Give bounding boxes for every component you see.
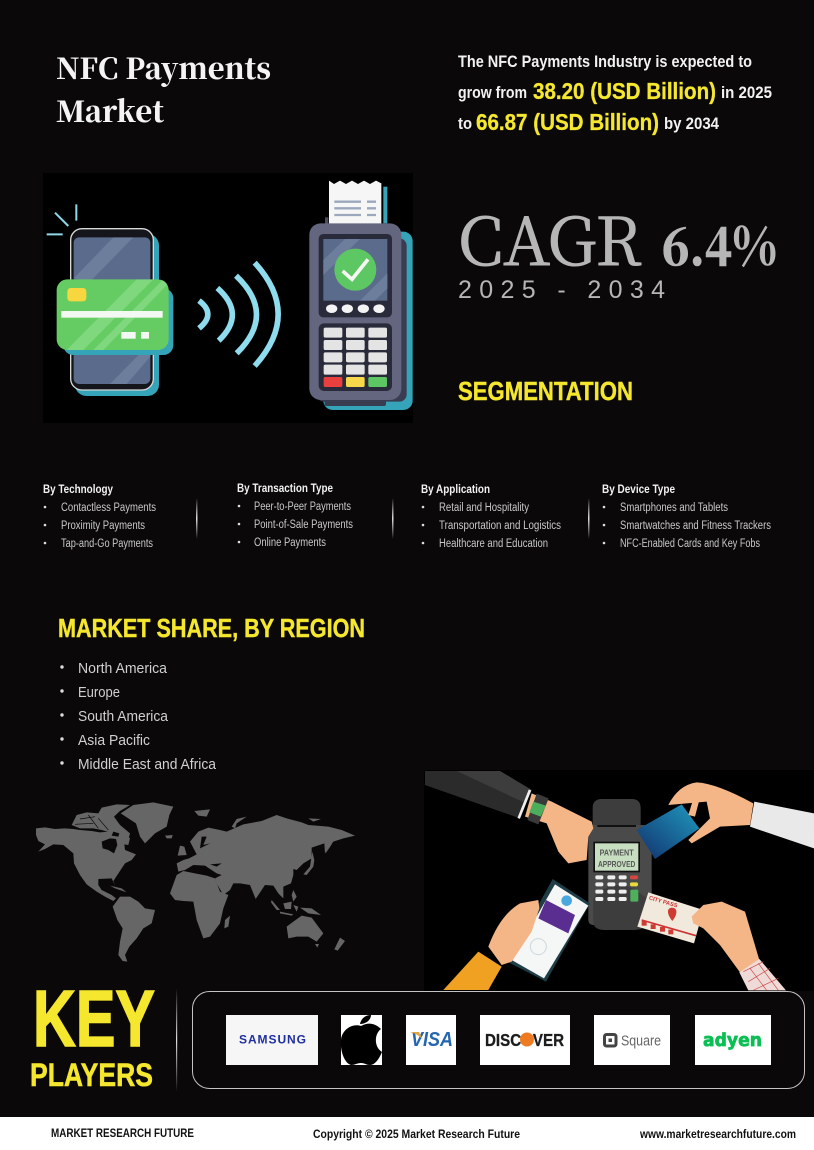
segment: by application: Retail and Hospitality <box>439 502 529 514</box>
icon: hand with city pass card: CITY PASS <box>648 895 678 909</box>
icon: card terminal: PAYMENT <box>600 848 634 858</box>
icon: hand with smartwatch <box>425 771 593 863</box>
icon: card terminal <box>588 799 652 930</box>
logo: Samsung: SAMSUNG <box>239 1032 306 1046</box>
segment: by device type: By Device Type <box>602 482 675 496</box>
forecast statement: 38.20 (USD Billion) <box>533 78 716 104</box>
icon: phone with card <box>47 204 173 396</box>
forecast statement: by 2034 <box>664 114 719 133</box>
logo: Discover <box>480 1015 570 1065</box>
forecast statement: in 2025 <box>721 83 772 102</box>
segment: by technology <box>43 482 156 550</box>
forecast statement <box>458 52 772 135</box>
title: NFC Payments <box>56 47 271 88</box>
segment: by transaction type: Online Payments <box>254 537 326 549</box>
region list: South America <box>78 708 169 725</box>
CAGR figure: 2025 - 2034 <box>458 276 665 304</box>
segment: by device type: NFC-Enabled Cards and Key Fobs <box>620 538 760 550</box>
icon: contactless waves <box>199 263 278 366</box>
footer: Copyright © 2025 Market Research Future <box>313 1127 520 1141</box>
heading: market share by region: MARKET SHARE, BY REGION <box>58 613 365 643</box>
segment: by application: Healthcare and Education <box>439 538 548 550</box>
CAGR figure: 6.4% <box>662 205 777 280</box>
segment: by transaction type: Point-of-Sale Payments <box>254 519 353 531</box>
segment: by application <box>421 482 561 550</box>
CAGR figure <box>458 189 777 304</box>
segment: by technology: Tap-and-Go Payments <box>61 538 153 550</box>
icon: hand with bank card <box>637 782 814 859</box>
CAGR figure: CAGR <box>458 189 642 284</box>
segment: by technology: Proximity Payments <box>61 520 145 532</box>
key players heading <box>30 974 155 1093</box>
heading: segmentation: SEGMENTATION <box>458 376 633 406</box>
icon: hand with city pass card <box>637 892 786 990</box>
segment: by device type: Smartphones and Tablets <box>620 502 728 514</box>
key players heading: KEY <box>33 974 155 1063</box>
region list: Asia Pacific <box>78 732 150 749</box>
segment: by transaction type: Peer-to-Peer Payments <box>254 501 351 513</box>
logo: Visa: VISA <box>411 1029 453 1051</box>
forecast statement: 66.87 (USD Billion) <box>476 109 659 135</box>
segment: by technology: Contactless Payments <box>61 502 156 514</box>
title <box>56 47 271 131</box>
forecast statement: The NFC Payments Industry is expected to <box>458 52 752 71</box>
key players heading: PLAYERS <box>30 1057 153 1093</box>
region list: Middle East and Africa <box>78 756 217 773</box>
logo: Apple <box>341 1015 382 1065</box>
footer <box>0 1117 814 1150</box>
key players logos panel <box>192 992 804 1088</box>
segment: by transaction type <box>237 481 353 549</box>
segment: by device type: Smartwatches and Fitness Trackers <box>620 520 771 532</box>
title: Market <box>56 90 164 131</box>
icon: payment terminal <box>309 181 413 410</box>
forecast statement: to <box>458 114 472 133</box>
logo: Square: Square <box>621 1032 661 1050</box>
logo: Visa <box>406 1015 456 1065</box>
world map <box>36 802 355 962</box>
region list: Europe <box>78 684 120 701</box>
logo: Adyen: adyen <box>703 1030 762 1051</box>
forecast statement: grow from <box>458 83 527 102</box>
logo: Square <box>594 1015 670 1065</box>
segment: by device type <box>602 482 771 550</box>
logo: Adyen <box>695 1015 771 1065</box>
region list: North America <box>78 660 168 677</box>
illustration: phone paying at terminal <box>43 173 413 423</box>
segment: by transaction type: By Transaction Type <box>237 481 333 495</box>
illustration: contactless payment methods <box>424 770 814 991</box>
region list <box>60 660 217 773</box>
footer: MARKET RESEARCH FUTURE <box>51 1126 194 1140</box>
icon: hand with phone <box>443 879 590 990</box>
segment: by technology: By Technology <box>43 482 113 496</box>
logo: Samsung <box>226 1015 318 1065</box>
icon: card terminal: APPROVED <box>598 859 635 869</box>
segment: by application: By Application <box>421 482 490 496</box>
segment: by application: Transportation and Logistics <box>439 520 561 532</box>
logo: Discover: DISCOVER <box>485 1030 564 1050</box>
